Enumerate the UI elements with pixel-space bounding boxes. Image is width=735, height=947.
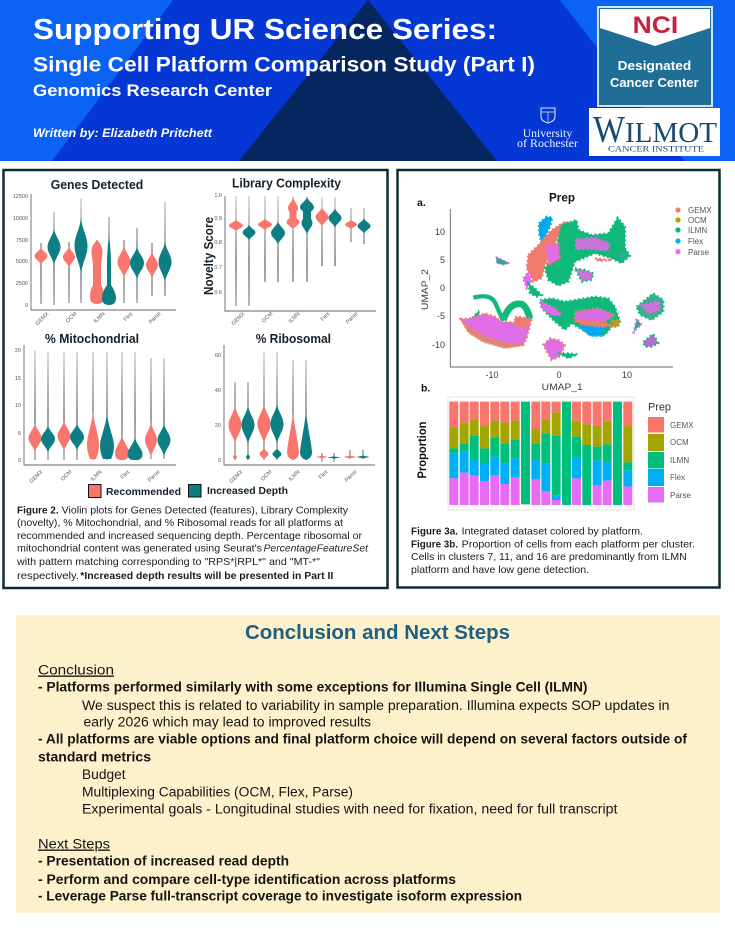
department name: Genomics Research Center: [33, 82, 273, 100]
chart: percent ribosomal violins: 20: [215, 423, 221, 429]
logo: Wilmot Cancer Institute: [589, 108, 720, 156]
header banner: [0, 0, 735, 161]
chart: percent mitochondrial violins: [15, 331, 176, 485]
logo: Wilmot Cancer Institute: W: [593, 109, 625, 151]
chart: stacked proportion bars: b.: [421, 382, 430, 394]
chart: umap colored by platform: 5: [440, 255, 445, 265]
legend: bar platforms: Parse: [670, 491, 691, 500]
chart: umap colored by platform: Prep: [549, 192, 575, 204]
chart: library complexity violins: 0.6: [214, 290, 222, 296]
text block: conclusion: Budget: [82, 767, 126, 782]
caption: figure 2: (novelty), % Mitochondrial, and % Ribosomal reads for all platforms at: [17, 517, 343, 529]
chart: library complexity violins: 0.8: [214, 240, 222, 246]
caption: figure 2: Figure 2.: [17, 504, 59, 516]
chart: percent ribosomal violins: GEMX: [229, 469, 245, 485]
chart: genes detected violins: [13, 177, 176, 327]
text block: conclusion: early 2026 which may lead to improved results: [84, 714, 371, 730]
chart: umap colored by platform: 10: [435, 227, 445, 237]
text block: conclusion: - All platforms are viable options and final platform choice will depend on several factors outside of: [38, 732, 688, 746]
logo: University of Rochester: [517, 108, 578, 150]
chart: genes detected violins: 7500: [16, 238, 28, 244]
chart: umap colored by platform: UMAP_1: [542, 382, 583, 392]
chart: library complexity violins: [201, 176, 376, 327]
caption: figure 3: Figure 3a.: [411, 526, 458, 538]
title: Supporting UR Science Series:: [33, 14, 497, 46]
caption: figure 3: Proportion of cells from each platform per cluster.: [462, 538, 695, 550]
caption: figure 2: *Increased depth results will be presented in Part II: [80, 570, 333, 582]
panel: figure 2 violin plots: [4, 170, 388, 588]
chart: percent ribosomal violins: % Ribosomal: [256, 331, 331, 346]
text block: next steps: Next Steps: [38, 836, 110, 852]
text block: next steps: - Perform and compare cell-type identification across platforms: [38, 872, 456, 887]
chart: library complexity violins: Flex: [320, 311, 332, 323]
chart: umap colored by platform: [417, 192, 712, 392]
chart: umap colored by platform: 10: [622, 370, 632, 380]
chart: genes detected violins: 10000: [13, 216, 28, 222]
chart: stacked proportion bars: [417, 382, 694, 510]
legend: bar platforms: Flex: [670, 473, 685, 482]
caption: figure 2: mitochondrial content was generated using Seurat's: [17, 542, 262, 554]
chart: umap colored by platform: 0: [556, 370, 562, 380]
chart: library complexity violins: 0.9: [214, 216, 222, 222]
caption: figure 2: Violin plots for Genes Detected (features), Library Complexity: [62, 504, 349, 516]
text block: next steps: - Presentation of increased read depth: [38, 854, 289, 868]
chart: percent ribosomal violins: OCM: [260, 469, 274, 482]
chart: percent mitochondrial violins: 0: [18, 458, 21, 464]
legend: umap platforms: ILMN: [688, 226, 707, 235]
caption: figure 2: recommended and increased sequencing depth. Percentage ribosomal or: [17, 530, 363, 542]
chart: umap colored by platform: -10: [432, 340, 445, 350]
chart: percent ribosomal violins: Flex: [318, 469, 330, 481]
caption: figure 2: [16, 504, 369, 582]
logo: NCI designated cancer center: NCI: [633, 12, 678, 39]
axis label: novelty score: Novelty Score: [201, 217, 216, 295]
chart: umap colored by platform: UMAP_2: [420, 269, 430, 310]
author: Written by: Elizabeth Pritchett: [33, 126, 213, 140]
legend: bar platforms: Prep: [648, 402, 671, 414]
caption: figure 2: with pattern matching corresponding to "RPS*|RPL*" and "MT-*": [16, 556, 320, 568]
panel: conclusion and next steps: [16, 615, 720, 913]
logo: Wilmot Cancer Institute: CANCER INSTITUTE: [608, 144, 704, 154]
caption: figure 3: Cells in clusters 7, 11, and 16 are predominantly from ILMN: [411, 551, 687, 563]
chart: library complexity violins: GEMX: [231, 311, 247, 327]
text block: conclusion: We suspect this is related to variability in sample preparation. Illumina expects SOP updates in: [82, 698, 670, 713]
legend: bar platforms: GEMX: [670, 421, 694, 430]
text block: conclusion: Multiplexing Capabilities (OCM, Flex, Parse): [82, 784, 353, 800]
chart: genes detected violins: 0: [25, 303, 28, 309]
panel: figure 3 umap and proportions: [398, 170, 720, 588]
logo: University of Rochester: University: [523, 126, 572, 140]
chart: genes detected violins: Flex: [123, 311, 135, 323]
chart: percent mitochondrial violins: % Mitochondrial: [45, 331, 139, 346]
legend: recommended and increased depth: [88, 484, 288, 498]
chart: percent ribosomal violins: 40: [215, 388, 221, 394]
legend: bar platforms: ILMN: [670, 456, 689, 465]
chart: percent ribosomal violins: [215, 331, 375, 485]
legend: umap platforms: Parse: [688, 248, 709, 257]
logo: Wilmot Cancer Institute: ILMOT: [625, 117, 717, 149]
text block: conclusion: [38, 662, 688, 816]
chart: genes detected violins: OCM: [65, 311, 79, 324]
chart: stacked proportion bars: Proportion: [417, 422, 429, 478]
chart: genes detected violins: Genes Detected: [51, 177, 143, 192]
legend: recommended and increased depth: Recommended: [106, 487, 181, 498]
text block: next steps: [38, 836, 522, 904]
caption: figure 3: Integrated dataset colored by platform.: [462, 526, 643, 538]
chart: percent ribosomal violins: Parse: [344, 469, 358, 484]
legend: recommended and increased depth: Increased Depth: [207, 486, 288, 497]
chart: percent mitochondrial violins: 10: [15, 403, 21, 409]
chart: library complexity violins: OCM: [261, 311, 275, 324]
logo: NCI designated cancer center: Designated: [618, 58, 691, 73]
chart: percent ribosomal violins: 60: [215, 353, 221, 359]
chart: percent mitochondrial violins: 15: [15, 376, 21, 382]
subtitle: Single Cell Platform Comparison Study (Part I): [33, 54, 535, 76]
chart: library complexity violins: 0.7: [214, 265, 222, 271]
chart: library complexity violins: ILMN: [288, 311, 301, 325]
logo: NCI designated cancer center: [598, 7, 712, 106]
chart: percent mitochondrial violins: GEMX: [29, 469, 45, 485]
legend: umap platforms: Flex: [688, 237, 703, 246]
text block: next steps: - Leverage Parse full-transcript coverage to investigate isoform expression: [38, 888, 522, 904]
chart: genes detected violins: 2500: [16, 281, 28, 287]
legend: umap platforms: OCM: [688, 216, 707, 225]
text block: conclusion: Experimental goals - Longitudinal studies with need for fixation, need for full transcript: [82, 802, 618, 816]
legend: bar platforms: [648, 402, 694, 502]
chart: percent mitochondrial violins: 20: [15, 348, 21, 354]
caption: figure 2: PercentageFeatureSet: [264, 542, 369, 554]
text block: conclusion: - Platforms performed similarly with some exceptions for Illumina Single Cell (ILMN): [38, 680, 588, 694]
chart: genes detected violins: Parse: [148, 311, 162, 326]
chart: percent mitochondrial violins: Parse: [147, 469, 161, 484]
legend: umap platforms: [675, 206, 712, 257]
caption: figure 3: [411, 526, 695, 576]
chart: umap colored by platform: 0: [440, 283, 445, 293]
text block: conclusion: standard metrics: [38, 750, 151, 764]
chart: library complexity violins: Library Complexity: [232, 176, 342, 190]
chart: percent mitochondrial violins: Flex: [120, 469, 132, 481]
chart: percent ribosomal violins: 0: [218, 458, 221, 464]
caption: figure 2: respectively.: [17, 570, 79, 582]
legend: bar platforms: OCM: [670, 438, 689, 447]
heading: conclusion and next steps: Conclusion and Next Steps: [245, 622, 510, 644]
chart: percent ribosomal violins: ILMN: [288, 469, 301, 483]
chart: genes detected violins: ILMN: [93, 311, 106, 325]
logo: NCI designated cancer center: Cancer Center: [610, 75, 698, 90]
chart: umap colored by platform: -10: [485, 370, 499, 380]
chart: genes detected violins: 12500: [13, 194, 28, 200]
caption: figure 3: platform and have low gene detection.: [411, 564, 589, 576]
legend: umap platforms: GEMX: [688, 206, 712, 215]
chart: umap colored by platform: a.: [417, 197, 426, 209]
logo: University of Rochester: of Rochester: [517, 136, 578, 150]
chart: percent mitochondrial violins: OCM: [60, 469, 74, 482]
chart: genes detected violins: 5000: [16, 259, 28, 265]
chart: genes detected violins: GEMX: [35, 311, 51, 327]
chart: umap colored by platform: -5: [437, 311, 445, 321]
chart: percent mitochondrial violins: ILMN: [90, 469, 103, 483]
text block: conclusion: Conclusion: [38, 662, 114, 678]
chart: library complexity violins: Parse: [345, 311, 359, 326]
chart: library complexity violins: 1.0: [214, 193, 222, 199]
caption: figure 3: Figure 3b.: [411, 538, 458, 550]
chart: percent mitochondrial violins: 5: [18, 431, 21, 437]
